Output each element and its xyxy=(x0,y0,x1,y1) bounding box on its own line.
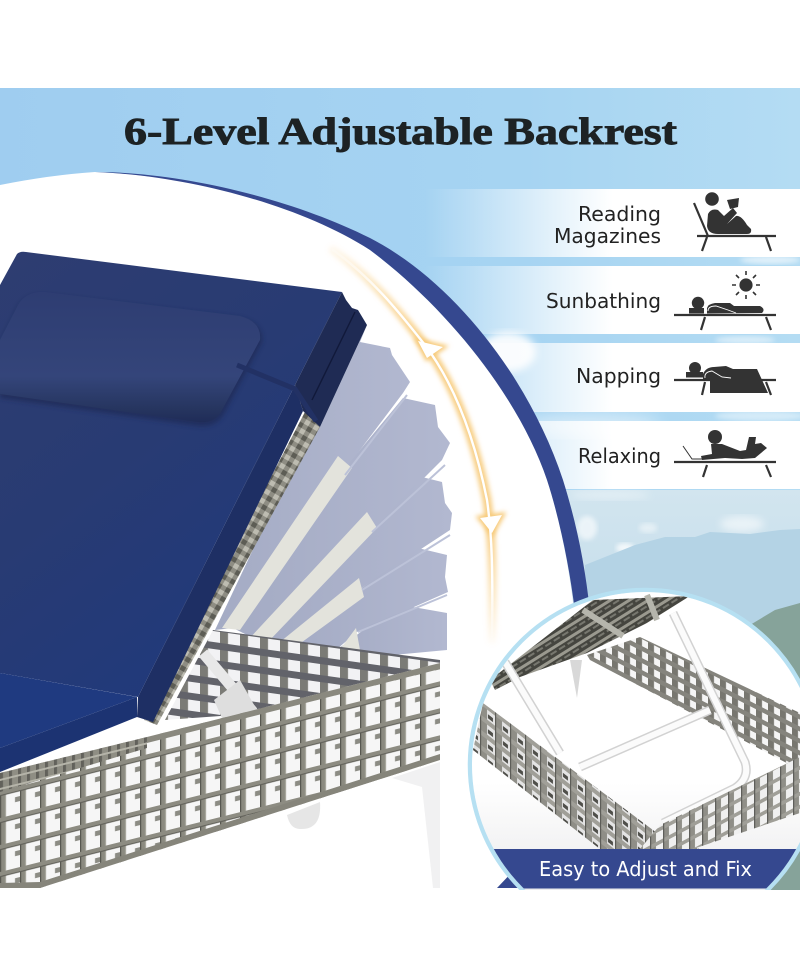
icon: reading on lounger xyxy=(694,192,776,251)
lounger leg xyxy=(392,762,440,888)
cushion seam xyxy=(312,312,355,400)
row: sunbathing: Sunbathing xyxy=(546,289,661,313)
icon: napping under blanket xyxy=(674,362,776,395)
headrest pillow xyxy=(0,325,263,427)
arrow: up and down adjustment xyxy=(333,250,502,640)
cushion end xyxy=(295,292,367,427)
caption text: Easy to Adjust and Fix xyxy=(539,857,752,881)
row: reading magazines: Magazines xyxy=(554,224,661,248)
pillow strap xyxy=(237,365,316,421)
side wicker rail xyxy=(640,757,800,849)
front wicker rail xyxy=(473,703,700,849)
rear wicker rail xyxy=(587,637,800,770)
navy arc xyxy=(95,172,590,612)
cushion top surface xyxy=(0,252,342,697)
white bottom margin xyxy=(0,890,800,977)
adjuster wheel xyxy=(287,802,320,829)
backrest straps xyxy=(583,595,657,636)
caption banner xyxy=(494,849,796,888)
icon: sunbathing on lounger xyxy=(674,271,776,330)
wicker backrest strip xyxy=(144,410,320,725)
icon: relaxing with laptop xyxy=(674,430,776,477)
reclined navy cushion xyxy=(0,252,367,725)
ghost backrest positions xyxy=(215,325,452,660)
row: sunbathing xyxy=(425,266,800,334)
row: napping: Napping xyxy=(576,364,661,388)
navy arc tip xyxy=(497,868,532,888)
lounger front wicker rail xyxy=(0,663,440,888)
row: napping xyxy=(425,343,800,412)
white curved panel xyxy=(0,172,575,890)
cushion side xyxy=(137,385,303,722)
bottom wicker edge xyxy=(0,754,440,888)
seat cushion xyxy=(0,673,137,772)
mountains xyxy=(585,529,800,624)
row: relaxing: Relaxing xyxy=(578,444,661,468)
adjustment strut xyxy=(203,653,258,725)
main lounger back rail xyxy=(165,630,440,720)
support tubes xyxy=(505,613,746,823)
title: 6-Level Adjustable Backrest xyxy=(124,111,677,153)
row: reading magazines: Reading xyxy=(578,202,661,226)
inset detail circle xyxy=(468,588,800,890)
clouds xyxy=(480,256,800,553)
wicker top edge xyxy=(147,663,440,743)
row: relaxing xyxy=(425,421,800,489)
leg xyxy=(570,660,582,698)
row: reading magazines xyxy=(425,189,800,257)
flipped woven backrest xyxy=(490,596,690,690)
green hill xyxy=(750,603,800,890)
seat rail dense weave xyxy=(0,737,147,792)
feature rows xyxy=(425,189,800,489)
